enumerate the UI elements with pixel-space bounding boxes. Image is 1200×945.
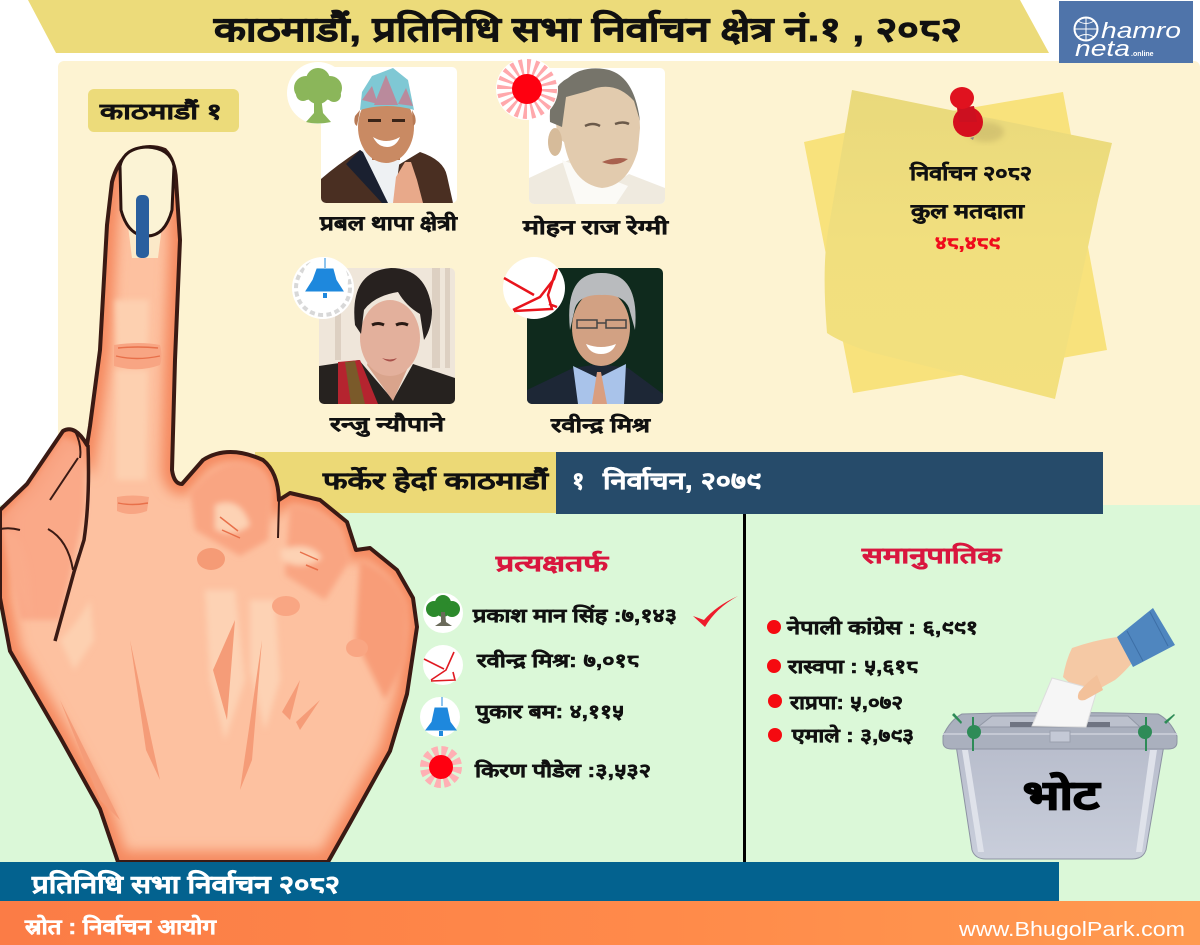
panel: direct votes: प्रत्यक्षतर्फ <box>495 550 610 576</box>
panel: proportional votes: एमाले : ३,७९३ <box>791 724 914 747</box>
logo: hamro neta: hamro <box>1101 18 1181 43</box>
title banner: काठमाडौं, प्रतिनिधि सभा निर्वाचन क्षेत्र नं.१ , २०८२ <box>213 9 962 49</box>
section bar: looking back: फर्केर हेर्दा काठमाडौं <box>322 467 549 495</box>
column divider <box>743 514 746 862</box>
finger nail <box>127 218 163 258</box>
panel: proportional votes <box>767 542 1003 747</box>
candidate photo: Mohan Raj Regmi <box>529 68 665 204</box>
candidate photo: Ranju Neupane <box>319 268 455 404</box>
gap between thumb and index finger <box>75 530 87 570</box>
sticky note with total voters: ४८,४८९ <box>935 233 1001 253</box>
party icon: tree <box>287 62 349 124</box>
panel: direct votes: किरण पौडेल :३,५३२ <box>474 759 651 782</box>
sticky note with total voters: निर्वाचन २०८२ <box>909 161 1032 185</box>
panel: cream background <box>58 61 1200 511</box>
candidate name: मोहन राज रेग्मी <box>522 215 669 239</box>
illustration: ballot box <box>943 608 1177 859</box>
panel: direct votes: प्रकाश मान सिंह :७,१४३ <box>472 604 677 627</box>
sticky note with total voters <box>804 87 1112 399</box>
panel: proportional votes: राप्रपा: ५,०७२ <box>789 693 903 714</box>
candidate photo: Prabal Thapa Chhetri <box>321 67 457 203</box>
section bar: looking back: १ <box>572 468 584 495</box>
candidate name: प्रबल थापा क्षेत्री <box>319 211 458 235</box>
icon: red push pin <box>950 87 1004 142</box>
party icon: sun <box>496 58 558 120</box>
footer source bar <box>0 901 1200 945</box>
logo: hamro neta: neta <box>1075 36 1130 61</box>
panel: proportional votes: रास्वपा : ५,६१८ <box>787 657 918 678</box>
panel: proportional votes: समानुपातिक <box>861 542 1003 570</box>
hand outline <box>0 147 417 862</box>
title banner <box>28 0 1049 53</box>
party icon: plough <box>503 257 565 319</box>
candidate name: रन्जु न्यौपाने <box>329 412 445 437</box>
ballot paper <box>1032 678 1097 727</box>
constituency label <box>88 89 239 132</box>
section bar: looking back: निर्वाचन, २०७९ <box>602 467 762 495</box>
ink mark <box>136 195 149 258</box>
sticky note with total voters: कुल मतदाता <box>910 201 1025 224</box>
logo: hamro neta <box>1059 1 1193 63</box>
green seals <box>952 713 1175 751</box>
panel: direct votes: पुकार बम: ४,११५ <box>475 702 624 724</box>
candidate name: रवीन्द्र मिश्र <box>550 413 651 437</box>
illustration: ballot box: भोट <box>1023 772 1101 818</box>
panel: proportional votes: नेपाली कांग्रेस : ६,९९१ <box>786 616 978 639</box>
panel: direct votes <box>420 550 738 783</box>
footer source bar: स्रोत : निर्वाचन आयोग <box>24 914 217 939</box>
footer title bar <box>0 862 1059 901</box>
section bar: looking back <box>255 452 1103 514</box>
voter thumb <box>1078 675 1103 700</box>
candidate photo: Rabindra Mishra <box>527 268 663 404</box>
icon: tree <box>423 593 463 633</box>
logo: hamro neta: .online <box>1131 51 1154 58</box>
constituency label: काठमाडौं १ <box>99 98 222 124</box>
illustration: hand with inked index finger <box>0 140 420 865</box>
icon: sun <box>425 751 457 783</box>
panel: direct votes: रवीन्द्र मिश्र: ७,०१८ <box>476 649 639 672</box>
panel: green results background <box>0 505 1200 901</box>
icon: plough <box>423 645 463 685</box>
voter sleeve <box>1117 608 1175 667</box>
party icon: bell <box>292 257 354 319</box>
icon: winner check mark <box>693 596 738 627</box>
voter hand <box>1063 637 1137 697</box>
footer source bar: www.BhugolPark.com <box>958 919 1185 941</box>
icon: bell <box>420 697 460 737</box>
footer title bar: प्रतिनिधि सभा निर्वाचन २०८२ <box>31 870 340 899</box>
